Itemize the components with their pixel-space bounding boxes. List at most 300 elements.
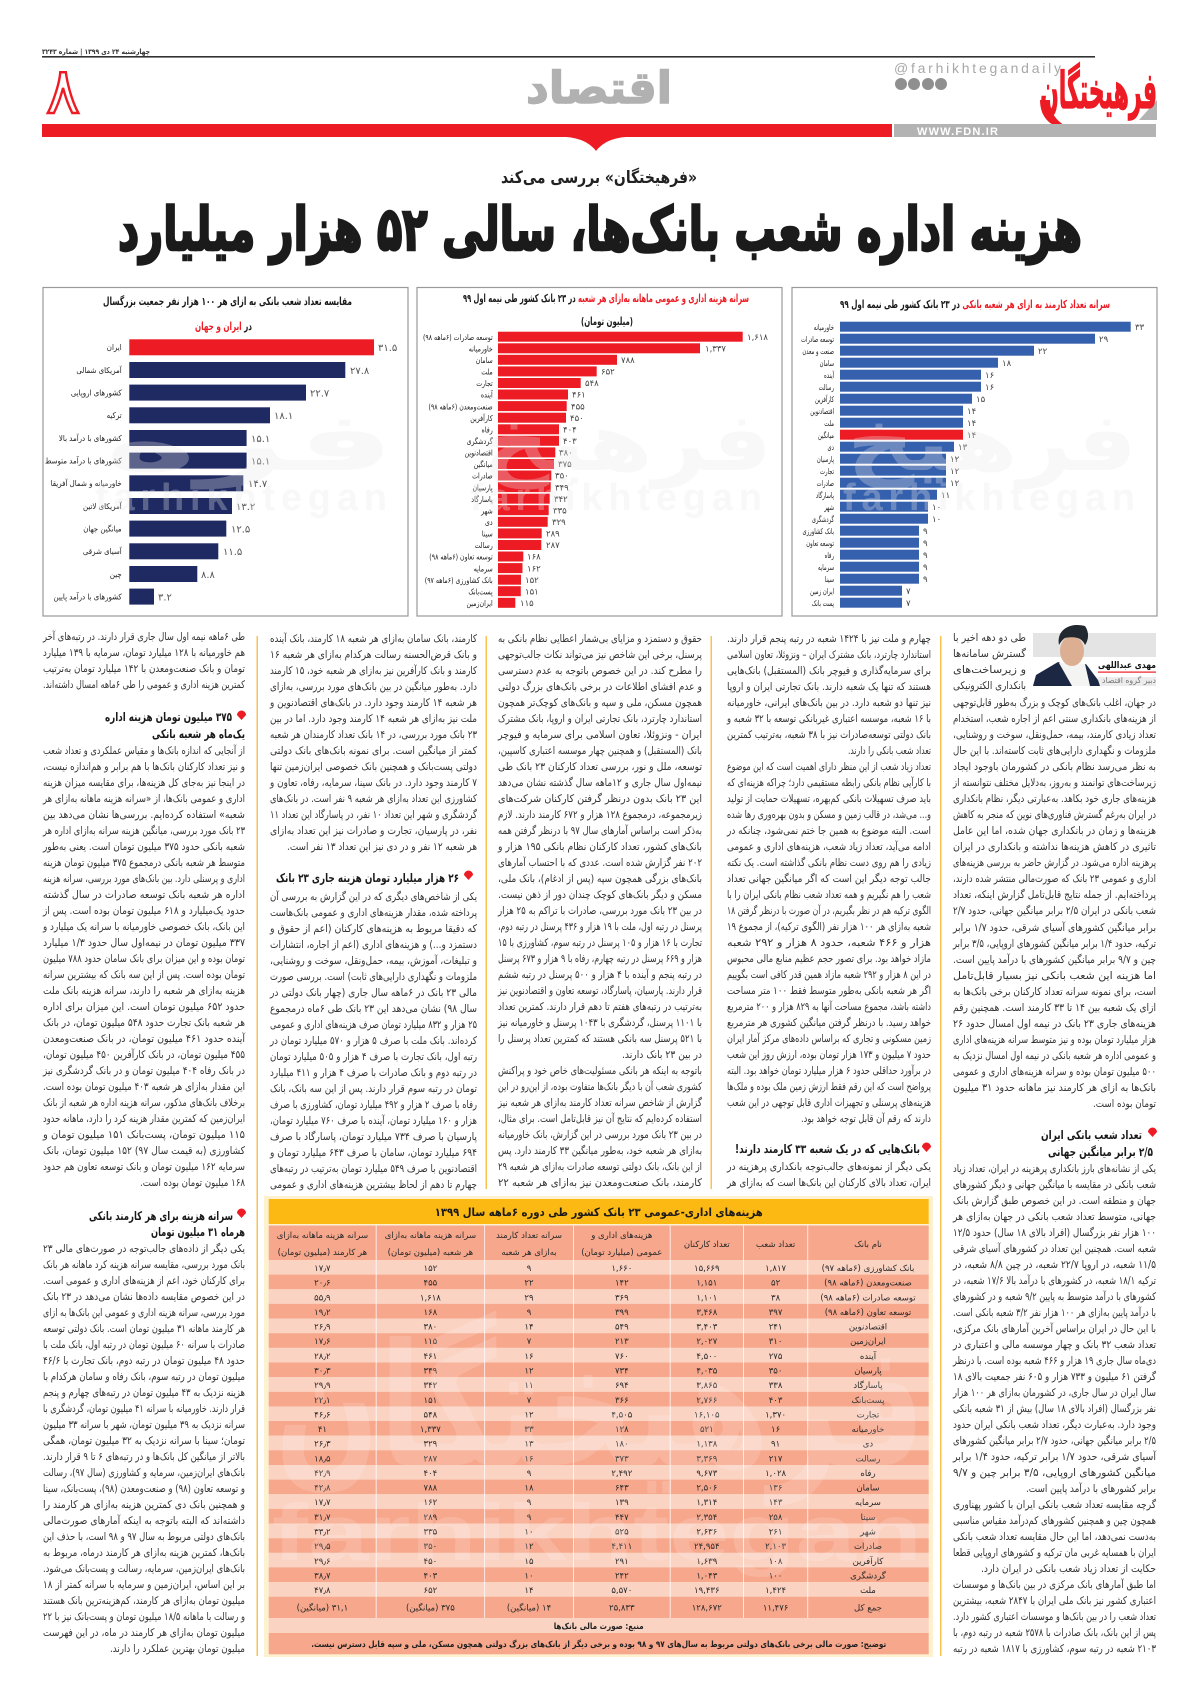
text column 5: طی ۶ماهه نیمه اول سال جاری قرار دارند. در رتبه‌های آخر	[42, 630, 245, 643]
text column 5	[42, 630, 245, 691]
table rows: ۳۹۷	[769, 1308, 783, 1318]
text column 1 body: است، برای نمونه سرانه تعداد کارکنان برخی بانک‌ها به	[953, 986, 1156, 998]
text column 3: توسعه، ملل و نور، بررسی تعداد کارکنان ۲۳ بانک طی	[498, 761, 702, 773]
table rows: ۱,۳۱۴	[696, 1498, 717, 1508]
table rows: سرمایه	[855, 1498, 881, 1508]
text column 4: دارد. به‌طور میانگین در بین بانک‌های مورد بررسی، به‌ازای	[270, 680, 477, 693]
values: ۱,۳۳۷	[705, 344, 726, 354]
text column 5 third section: میلیون تومان بهترین عملکرد را دارند.	[110, 1643, 245, 1655]
text column 1 second section: میانگین کشورهای اروپایی، ۳/۵ برابر چین و ۹/۷	[953, 1466, 1156, 1479]
table rows: ۳۰٫۳	[314, 1366, 331, 1376]
text column 1 second section: گرفتن ۶۱ میلیون و ۷۳۳ هزار و ۶۰۵ نفر جمعیت بالای ۱۸	[953, 1370, 1156, 1383]
text column 5 third section: میلیون تومان به‌ازای هر کارمند، کم‌هزینه‌ترین بانک هستند	[43, 1595, 245, 1607]
text column 2: چهارم و ملت نیز با ۱۴۲۴ شعبه در رتبه پنجم قرار دارند.	[727, 633, 931, 645]
bank labels: اقتصادنوین	[465, 448, 493, 458]
text column 5 second section: شعبه بانکی حدود ۳۷۵ میلیون تومان است. یعنی به‌طور	[42, 841, 245, 853]
table rows: ۱۷٫۶	[314, 1337, 331, 1347]
table rows: کارآفرین	[853, 1555, 884, 1567]
bank labels: توسعه تعاون (۶ماهه ۹۸)	[429, 552, 493, 562]
values	[158, 343, 397, 604]
text column 4 second section: تومان در رتبه سوم قرار دارند. پس از این سه بانک، بانک	[270, 1083, 477, 1095]
bank labels: کارآفرین	[815, 394, 835, 404]
table rows: پارسیان	[854, 1366, 882, 1376]
table rows: ۵۴۸	[424, 1410, 438, 1420]
text column 3: را مطرح کند. در این خصوص باتوجه به عدم دسترسی	[498, 665, 702, 677]
text column 5 second section: شعبه» استفاده کرده‌ایم. بررسی‌ها نشان می‌دهد بین	[43, 809, 245, 821]
text column 1 second section: جهانی، متوسط تعداد شعب بانکی در جهان به‌ازای هر	[952, 1211, 1156, 1223]
text column 4 second section	[269, 890, 477, 1191]
text column 1 second section: گرچه مقایسه تعداد شعب بانکی ایران با کشور پهناوری	[953, 1498, 1156, 1511]
table rows: ۹	[527, 1308, 532, 1318]
table rows: ۱,۱۵۱	[696, 1279, 717, 1289]
values: ۲۸۹	[546, 530, 560, 540]
table rows: ۳۹۹	[615, 1308, 629, 1318]
table rows: ۱۴	[524, 1323, 534, 1333]
text column 3: به‌ترتیب در رتبه‌های هفتم تا دهم قرار دارند. کمترین تعداد	[498, 1001, 702, 1013]
table rows: ۱۰	[524, 1528, 534, 1538]
text column 2: داشته باشد، مجموع مساحت آنها به ۸۲۹ هزار و ۲۰۰ مترمربع	[727, 1000, 931, 1013]
text column 3: قرار دارند. پارسیان، پاسارگاد، توسعه تعاون و اقتصادنوین نیز	[497, 984, 702, 997]
text column 4 second section: ۲۵ هزار و ۸۳۲ میلیارد تومان صرف هزینه‌های اداری و عمومی	[270, 1019, 477, 1031]
text column 3: به‌ذکر است براساس آمارهای سال ۹۷ با درنظر گرفتن همه	[498, 824, 702, 837]
bank labels: آینده	[824, 370, 835, 380]
text column 4: نفر، در پارسیان، تجارت و صادرات نیز این تعداد به‌ازای	[270, 825, 477, 837]
values: ۱۵.۱	[251, 456, 270, 468]
values: ۷	[906, 599, 911, 609]
table rows: ۳۳۸	[769, 1381, 783, 1391]
table rows: ۱۸۰	[615, 1440, 629, 1450]
text column 5 second section: تومان بوده است. پس از این سه بانک که بیشترین سرانه	[43, 969, 245, 981]
text column 5 second section: در اینجا نیز به‌جای کل هزینه‌ها، برای مقایسه میزان هزینه	[43, 777, 245, 789]
text column 5 second section: اداره هر شعبه بانک توسعه صادرات در سال گذشته	[43, 888, 245, 901]
text column 2: بانک دولتی توسعه‌صادرات نیز با ۳۸ شعبه، به‌ترتیب کمترین	[727, 729, 931, 741]
text column 1 body: اما هزینه این شعب بانکی نیز بسیار قابل‌تامل	[953, 970, 1156, 982]
table rows: ۱۵,۶۶۹	[694, 1264, 720, 1274]
table rows: ۴۱	[318, 1425, 327, 1435]
text column 3: این ۲۳ بانک بدون درنظر گرفتن کارکنان شرکت‌های	[498, 792, 702, 805]
table rows: ۱۵۲	[424, 1264, 438, 1274]
table rows: ۱۴۲	[615, 1279, 629, 1289]
table rows: ۲۵۸	[769, 1513, 783, 1523]
text column 5 third section: بانک‌های ایران‌زمین، سرمایه، رسالت و پست‌بانک می‌شود.	[43, 1563, 245, 1575]
values: ۳۳	[1135, 323, 1145, 333]
text column 3: مسکن و دیگر بانک‌های کوچک چندان دور از ذهن نیست.	[498, 888, 702, 901]
table rows: ۲۶۱	[769, 1528, 782, 1538]
table rows: ۹	[527, 1264, 532, 1274]
table rows: سامان	[856, 1484, 880, 1494]
table rows: ۲۸٫۲	[314, 1352, 331, 1362]
bank labels: کارآفرین	[470, 412, 493, 423]
text column 1 second section: پس از این بانک، بانک صادرات با ۲۵۷۸ شعبه در رتبه دوم، با	[953, 1627, 1156, 1639]
website band	[894, 124, 1156, 138]
values: ۲۲.۷	[310, 388, 330, 400]
values: ۴۶۱	[572, 391, 586, 401]
table rows: ۲۲	[524, 1279, 534, 1289]
table rows: صادرات	[854, 1542, 882, 1552]
heading: branches vs world average: تعداد شعب بانکی ایران	[1041, 1128, 1142, 1142]
values: ۱۵.۱	[251, 434, 270, 445]
text column 1 body: اداری و عمومی ۲۳ بانک که صورت‌مالی منتشر شده دارند،	[953, 873, 1156, 885]
text column 5 third section	[43, 1242, 245, 1655]
table rows: ۲۵,۸۳۳	[609, 1604, 635, 1614]
text column 4 second section: هزار و ۱۶۰ میلیارد تومان، آینده با صرف ۷۶۰ میلیارد تومان،	[270, 1114, 477, 1127]
text column 2: پرواضح است که این رقم فقط ارزش زمین ملک بوده و ملک‌ها	[727, 1081, 931, 1093]
text column 1 second section: وجود دارد. به‌عبارت دیگر، تعداد شعب بانکی ایران حدود	[953, 1418, 1156, 1431]
table rows: ۳۲۹	[424, 1440, 438, 1450]
bank labels: رسالت	[819, 383, 834, 392]
text column 5 third section: یکی دیگر از داده‌های جالب‌توجه در صورت‌های مالی ۲۳	[43, 1242, 245, 1255]
text column 3: در بین ۲۳ بانک مورد بررسی در این گزارش، بانک خاورمیانه	[498, 1128, 702, 1141]
table rows: ۱,۰۲۸	[765, 1469, 787, 1479]
text column 4 second section: رفاه با صرف ۲ هزار و ۴۹۲ میلیارد تومان، کشاورزی با صرف	[270, 1099, 477, 1111]
text column 1 second section: جهان و منطقه است. در این خصوص طبق گزارش بانک	[953, 1194, 1156, 1207]
table rows: ۵,۵۷۰	[611, 1586, 632, 1596]
bank labels: تجارت	[476, 378, 493, 388]
text column 1 body	[952, 695, 1156, 1110]
table rows: ۹,۶۷۳	[696, 1469, 718, 1479]
values: ۱۲	[950, 479, 960, 489]
table rows: ۱۲۸,۶۷۲	[692, 1604, 722, 1614]
table rows: ۱۶	[524, 1454, 534, 1464]
author name: مهدی عبداللهی	[1098, 661, 1156, 671]
text column 2: و... می‌شد، در قالب زمین و مسکن و بدون بهره‌وری رها شده	[727, 809, 931, 821]
text column 2: تعداد شعب بانکی را دارند.	[848, 745, 931, 757]
table rows: ۳۴۲	[424, 1381, 438, 1391]
text column 5 second section: آینده حدود ۴۶۱ میلیون تومان، در بانک صنعت‌ومعدن	[43, 1032, 246, 1045]
heading: 31 million per employee	[89, 1209, 246, 1240]
table note: توضیح: صورت مالی برخی بانک‌های دولتی مربوط به سال‌های ۹۷ و ۹۸ بوده و برخی دیگر از بانک‌های بزرگ دولتی همچون مسکن، ملی و سپه قابل دسترس نیست.	[311, 1639, 886, 1650]
text column 5 second section: تومان بوده و این میزان برای بانک سامان حدود ۷۸۸ میلیون	[43, 953, 245, 965]
panel: data table	[264, 1196, 933, 1657]
table header: سرانه هزینه ماهانه به‌ازای	[277, 1231, 368, 1241]
table rows: ۲۴,۹۵۴	[694, 1542, 720, 1552]
chart subtitle: (میلیون تومان)	[581, 315, 633, 328]
text column 3: در بین ۲۳ بانک دارند.	[622, 1049, 702, 1061]
table rows: آینده	[860, 1350, 877, 1362]
table rows: سینا	[861, 1513, 875, 1523]
table rows: ۵۴۹	[615, 1323, 629, 1333]
table rows: ۱۹,۴۳۶	[694, 1586, 720, 1596]
text column 5 second section: ۲۳ بانک مورد بررسی، میانگین هزینه سرانه به‌ازای اداره هر	[42, 824, 245, 837]
values: ۱۴	[967, 419, 976, 429]
table rows: ۲۱۷	[769, 1454, 783, 1464]
values: ۱,۶۱۸	[747, 333, 768, 343]
table rows: ۲۱۳	[615, 1337, 629, 1347]
text column 5 second section: اداری و پرسنلی دارد. بین بانک‌های مورد بررسی، سرانه هزینه	[43, 873, 245, 885]
table rows: ۱۴ (میانگین)	[507, 1603, 551, 1614]
table rows: ۱,۳۳۷	[420, 1425, 441, 1435]
text column 2: شعب را هم نگیریم و همه تعداد شعب نظام بانکی ایران را با	[727, 888, 931, 901]
table rows: ۳۱٫۷	[314, 1513, 331, 1523]
bars	[840, 322, 1131, 608]
text column 5 second section: در بانک رفاه ۴۰۴ میلیون تومان و در بانک گردشگری نیز	[42, 1064, 245, 1077]
text column 3: پرسنل، برخی این شاخص نیز می‌تواند نکات جالب‌توجهی	[498, 649, 702, 661]
text column 3: کارمند، بانک صنعت‌ومعدن نیز به‌ازای هر شعبه ۲۲	[498, 1177, 702, 1189]
table header: هزینه‌های اداری و	[590, 1231, 652, 1241]
text column 2: مازاد خواهد بود. برای تصور حجم عظیم منابع مالی محبوس	[727, 953, 931, 965]
table rows: پست‌بانک	[851, 1396, 885, 1406]
text column 5 third section: حدود ۴۸ میلیون تومان در رتبه دوم، بانک تجارت با ۴۶/۶	[43, 1355, 245, 1367]
bank labels: رفاه	[482, 425, 493, 435]
bars	[129, 339, 374, 605]
text column 3: در رتبه پنجم و آینده با ۴ هزار و ۵۰۰ پرسنل در رتبه ششم	[498, 968, 702, 981]
text column 3: گزارش از شاخص سرانه تعداد کارمند به‌ازای هر شعبه نیز	[497, 1096, 702, 1109]
values: ۱۰	[932, 515, 941, 525]
text column 3: باتوجه به اینکه هر بانکی مسئولیت‌های خاص خود و پراکنش	[498, 1065, 702, 1077]
text column 1 intro: و زیرساخت‌های	[953, 664, 1026, 676]
bank labels: توسعه تعاون	[806, 539, 834, 548]
table watermark: farhikhtegan	[272, 1488, 922, 1577]
bank labels: سینا	[482, 529, 493, 539]
text column 1 intro: طی دو دهه اخیر با	[953, 632, 1026, 644]
text column 5 second section: ۳۳۷ میلیون تومان در نیمه‌اول سال حدود ۱/۳ میلیارد	[43, 937, 245, 949]
values: ۳۲۹	[552, 518, 566, 528]
text column 4 second section: و تبلیغات، آموزش، بیمه، حمل‌ونقل، سوخت و روشنایی،	[270, 954, 477, 967]
chart watermarks	[95, 396, 1137, 519]
values: ۹	[923, 527, 928, 537]
panel: staff per branch chart	[792, 288, 1157, 616]
bank labels: پست‌بانک	[468, 587, 493, 597]
text column 1 second section: حکایت از تعداد زیاد شعب بانکی در ایران دارد.	[981, 1563, 1156, 1575]
text column 1 second section: برابر کشورهای با درآمد پایین است.	[1026, 1482, 1156, 1495]
values: ۱۱.۵	[223, 547, 242, 558]
table rows: توسعه صادرات (۶ماهه ۹۸)	[820, 1293, 916, 1303]
region labels: ایران	[107, 343, 122, 352]
bank labels: رفاه	[825, 551, 834, 560]
chart watermarks: farhikhtegan	[470, 477, 762, 519]
bank labels: دی	[828, 443, 834, 452]
table rows: ایران‌زمین	[850, 1337, 886, 1347]
table rows: پاسارگاد	[853, 1380, 883, 1391]
table rows: ۱۳	[524, 1440, 534, 1450]
table rows: ۲۶٫۳	[314, 1440, 331, 1450]
table rows: ۲۸۷	[424, 1454, 438, 1464]
region labels: کشورهای با درآمد متوسط	[45, 455, 122, 466]
table rows: ۴۲٫۹	[314, 1469, 331, 1479]
text column 5 second section: و نیز تعداد کارکنان بانک‌ها با هم برابر و هم‌اندازه نیست،	[43, 761, 245, 773]
bars	[498, 332, 743, 608]
region labels: میانگین جهان	[83, 524, 122, 534]
table rows: ۷۸۸	[424, 1484, 438, 1494]
values: ۲۸۷	[546, 541, 560, 551]
bank labels: پست بانک	[812, 599, 834, 608]
values: ۴۰۴	[563, 426, 577, 436]
text column 5: کمترین هزینه اداری و عمومی را طی ۶ماهه امسال داشته‌اند.	[43, 679, 245, 691]
masthead	[42, 48, 1157, 151]
bank labels: اقتصادنوین	[810, 407, 834, 416]
text column 1 second section: به‌دست نمی‌دهد، اما این حال مقایسه تعداد شعب بانکی	[953, 1531, 1156, 1543]
table rows: ۲,۰۲۷	[696, 1337, 718, 1347]
table rows: ۱۳۶	[769, 1484, 782, 1494]
table rows: ۱۵۱	[424, 1396, 437, 1406]
text column 5 second section: این مقدار به‌ازای هر شعبه ۴۰۳ میلیون تومان بوده است.	[43, 1081, 245, 1093]
text column 5: تومان و بانک صنعت‌ومعدن با ۱۴۲ میلیارد تومان به‌ترتیب	[43, 663, 245, 675]
table rows: ۱۶,۱۰۵	[694, 1410, 720, 1420]
values: ۱۶۸	[527, 553, 541, 563]
author role: دبیر گروه اقتصاد	[1102, 675, 1156, 685]
text column 5 second section: برخلاف بانک‌های مذکور، سرانه هزینه اداره هر شعبه از بانک	[43, 1097, 245, 1109]
text column 5 third section: و توسعه تعاون (۹۸) و صنعت‌ومعدن (۹۸)، پست‌بانک، سینا	[43, 1483, 245, 1495]
table rows: ۱۸٫۵	[314, 1454, 331, 1464]
social icons	[895, 78, 947, 90]
region labels: چین	[110, 570, 122, 579]
text column 2: با کارآیی نظام بانکی رابطه مستقیمی دارد؛ چراکه هزینه‌ای که	[727, 776, 931, 789]
bank labels: میانگین	[818, 430, 834, 440]
table title band: هزینه‌های اداری-عمومی ۲۳ بانک کشور طی دوره ۶ماهه سال ۱۳۹۹	[435, 1205, 763, 1220]
text column 1 body: تعداد زیادی کارمند، بیمه، حمل‌ونقل، سوخت و روشنایی،	[953, 729, 1156, 741]
text column 4: و بانک قرض‌الحسنه رسالت هرکدام به‌ازای هر شعبه ۱۶	[270, 649, 477, 661]
text column 4 second section: ۶۹۴ میلیارد تومان، سامان با صرف ۶۴۳ میلیارد تومان و	[269, 1147, 477, 1159]
text column 3: حقوق و دستمزد و مزایای بی‌شمار اعطایی نظام بانکی به	[498, 633, 702, 645]
table rows: ۴۴۷	[615, 1513, 629, 1523]
values: ۷۸۸	[621, 356, 635, 366]
heading: branches vs world average	[1041, 1128, 1157, 1159]
text column 5 third section: و همچنین بانک دی کمترین هزینه به‌ازای هر کارمند را	[43, 1499, 245, 1511]
values: ۳۱.۵	[378, 343, 397, 354]
text column 1 body: هزینه‌های جاری ۲۳ بانک در نیمه اول امسال حدود ۲۶	[953, 1018, 1156, 1030]
table rows: تجارت	[857, 1410, 880, 1420]
text column 3: بانک‌های کشور، تعداد کارکنان نظام بانکی ۱۹۵ هزار و	[497, 841, 702, 853]
text column 2: دارند که رقم آن قابل توجه خواهد بود.	[801, 1112, 931, 1125]
text column 2: در برآورد حداقلی حدود ۶ هزار میلیارد تومان خواهد بود. البته	[727, 1064, 931, 1077]
text column 5 second section	[42, 744, 246, 1189]
text column 3: در بین ۲۳ بانک مورد بررسی، صادرات با تراکم به ۲۵ هزار	[497, 905, 702, 917]
text column 3: کشوری شعب آن با دیگر بانک‌ها متفاوت بوده، از این‌رو در این	[498, 1080, 702, 1093]
text column 4: ملت نیز به‌ازای هر شعبه ۱۴ کارمند وجود دارد. اما در بین	[270, 713, 477, 725]
table rows: ۴۷٫۸	[314, 1586, 331, 1596]
table rows: ۳,۴۶۸	[696, 1308, 718, 1318]
bank labels: تجارت	[820, 467, 834, 476]
text column 2: خواهد رسید. با درنظر گرفتن میانگین کشوری هر مترمربع	[727, 1016, 931, 1029]
table rows: ۴۲٫۸	[314, 1484, 331, 1494]
values: ۱۱	[941, 491, 950, 501]
table rows: ۱,۶۱۸	[420, 1293, 441, 1303]
table rows: ۶۴۳	[615, 1484, 629, 1494]
values: ۳۸۰	[559, 449, 573, 459]
bank labels: صنعت‌ومعدن (۶ماهه ۹۸)	[429, 401, 493, 412]
table rows: ۱۲	[524, 1366, 534, 1376]
heading: 375 million per branch	[105, 710, 246, 741]
table rows: ۱۸	[524, 1484, 534, 1494]
text column 1 second section: اعتباری کشور نیز بانک ملی ایران با ۲۸۴۷ شعبه، بیشترین	[953, 1595, 1156, 1607]
text column 1 second section	[952, 1163, 1157, 1655]
text column 5 third section: بر این اساس، ایران‌زمین و سرمایه با سرانه کمتر از ۱۸	[43, 1579, 245, 1591]
values: ۳۳۵	[553, 506, 567, 516]
text column 5 third section: و رسالت با ماهانه ۱۸/۵ میلیون تومان و پست‌بانک نیز با ۲۲	[43, 1611, 245, 1623]
table rows: توسعه تعاون (۶ماهه ۹۸)	[825, 1308, 912, 1318]
text column 5 third section: مورد بررسی، سرانه هزینه اداری و عمومی این بانک‌ها به ازای	[43, 1307, 245, 1319]
table rows: ۱,۶۳۹	[696, 1557, 718, 1567]
text column 1 body: برابر میانگین کشورهای آسیای شرقی، حدود ۱/۷ برابر	[952, 921, 1156, 934]
page number: ۸	[46, 55, 80, 129]
values: ۱۶۲	[527, 564, 541, 574]
table rows: ۴,۵۰۰	[696, 1352, 717, 1362]
bank labels: پارسیان	[817, 455, 834, 464]
bank labels: صادرات	[817, 479, 834, 488]
values: ۱۸.۱	[274, 411, 293, 422]
text column 4 second section: ملزومات و نگهداری دارایی‌های ثابت) است. بررسی صورت	[270, 970, 477, 983]
text column 2: با ۱۶ شعبه، موسسه اعتباری غیربانکی توسعه با ۳۲ شعبه و	[726, 713, 931, 725]
heading: 375 million per branch: ۳۷۵ میلیون تومان هزینه اداره	[105, 710, 232, 725]
text column 5 third section: بالاتر از میانگین کل بانک‌ها و در رتبه‌های ۶ تا ۹ قرار دارند.	[43, 1450, 245, 1463]
bank labels: سرمایه	[474, 563, 493, 574]
panel: branches per 100 thousand adults chart	[43, 288, 408, 616]
text column 5 third section: تومان؛ سینا با سرانه نزدیک به ۳۲ میلیون تومان، همگی	[43, 1434, 245, 1447]
table rows: ۱۵	[524, 1557, 534, 1567]
table rows: ۱۶۲	[424, 1498, 438, 1508]
text column 4: هر شعبه ۱۲ نفر و در دی نیز این تعداد ۱۳ نفر است.	[287, 841, 477, 853]
values: ۹	[923, 539, 928, 549]
text column 5 third section: هزینه نزدیک به ۴۳ میلیون تومان در رتبه‌های چهارم و پنجم	[43, 1387, 245, 1399]
text column 5 second section: این بانک، بانک خصوصی خاورمیانه با سرانه یک میلیارد و	[42, 921, 245, 933]
text column 4: ۲۳ بانک مورد بررسی، در ۱۴ بانک تعداد کارمندان هر شعبه	[270, 729, 477, 741]
text column 2: ادامه می‌آید، تعداد زیاد شعب، هزینه‌های اداری و عمومی	[727, 840, 931, 853]
bank labels: گردشگری	[812, 514, 835, 524]
values: ۳۴۹	[555, 483, 569, 493]
text column 5 third section: سرانه نزدیک به ۳۹ میلیون تومان، شهر با سرانه ۳۳ میلیون	[43, 1419, 245, 1431]
heading: 26 thousand billion: ۲۶ هزار میلیارد تومان هزینه جاری ۲۳ بانک	[276, 871, 459, 886]
values	[520, 333, 768, 609]
text column 3: بانک (المستقبل) و همچنین چهار موسسه اعتباری کاسپین،	[498, 745, 702, 757]
region labels	[45, 343, 123, 602]
region labels: ترکیه	[107, 411, 122, 420]
table watermark: فرهیختگان	[275, 1308, 925, 1507]
table rows: ۱۷٫۷	[314, 1498, 331, 1508]
values	[906, 323, 1145, 609]
values: ۱۱۵	[520, 599, 534, 609]
table rows: ۱,۰۴۳	[696, 1571, 718, 1581]
table rows: ۱۰	[524, 1571, 534, 1581]
bank labels: آینده	[481, 389, 494, 400]
table rows: بانک کشاورزی (۶ماهه ۹۷)	[822, 1264, 914, 1274]
text column 2: شعبه به‌ازای هر ۱۰۰ هزار نفر (الگوی ترکیه)، از مجموع ۱۹	[727, 920, 931, 933]
table rows: ۲,۱۰۳	[765, 1542, 787, 1552]
text column 5 second section: حدود ۶۵۲ میلیون تومان است. این میزان برای اداره	[43, 1001, 245, 1013]
heading: branches vs world average: ۲/۵ برابر میانگین جهانی	[1048, 1145, 1153, 1159]
table rows: ۱,۳۷۰	[765, 1410, 786, 1420]
table rows: ۳۷۳	[615, 1454, 629, 1464]
values: ۱۳	[958, 443, 968, 453]
table rows: ۱,۶۶۰	[611, 1264, 632, 1274]
table header: تعداد کارکنان	[684, 1240, 730, 1250]
region labels: آمریکای لاتین	[83, 501, 123, 511]
values: ۴۵۵	[571, 402, 585, 412]
table rows: ۳۸۰	[424, 1323, 437, 1333]
values: ۱۵	[976, 395, 986, 405]
text column 5 second section: سرمایه ۱۶۲ میلیون تومان و بانک توسعه تعاون هم حدود	[43, 1161, 245, 1173]
table rows: ۱,۱۳۸	[696, 1440, 718, 1450]
date line: چهارشنبه ۲۴ دی ۱۳۹۹ | شماره ۳۲۴۳	[42, 48, 150, 57]
text column 2: زیادی را هم روی دست نظام بانکی گذاشته است. یک نکته	[727, 856, 931, 869]
region labels: آسیای شرقی	[83, 546, 123, 556]
table rows	[269, 1260, 929, 1618]
table rows: ۱,۸۱۷	[765, 1264, 787, 1274]
text column 1 body: ترکیه، حدود ۱/۴ برابر میانگین کشورهای اروپایی، ۳/۵ برابر	[952, 937, 1156, 950]
text column 1 body: پرداخته‌ایم. از جمله نتایج قابل‌تامل گزارش اینکه، تعداد	[953, 888, 1156, 901]
values: ۴۵۰	[570, 414, 584, 424]
table rows: ۲۸۹	[424, 1513, 438, 1523]
bank labels: سامان	[820, 359, 834, 368]
text column 4 second section: یکی از شاخص‌های دیگری که در این گزارش به بررسی آن	[270, 890, 477, 903]
text column 5 third section: میلیون تومان به‌ازای هر کارمند در ماه، در این فهرست	[43, 1627, 245, 1639]
text column 4 second section: پرداخته شده، مقدار هزینه‌های اداری و عمومی بانک‌هاست	[270, 907, 477, 919]
text column 1 body: بانک‌ها به ازای هر کارمند نیز ماهانه حدود ۳۱ میلیون	[953, 1082, 1156, 1094]
values: ۱۳.۲	[236, 502, 255, 513]
table rows: ۴۵۵	[424, 1279, 438, 1289]
text column 1 body: چین و ۹/۷ برابر میانگین کشورهای با درآمد پایین است.	[953, 953, 1156, 966]
bank labels: رسالت	[475, 540, 493, 550]
table rows: ۳۳	[524, 1425, 534, 1435]
